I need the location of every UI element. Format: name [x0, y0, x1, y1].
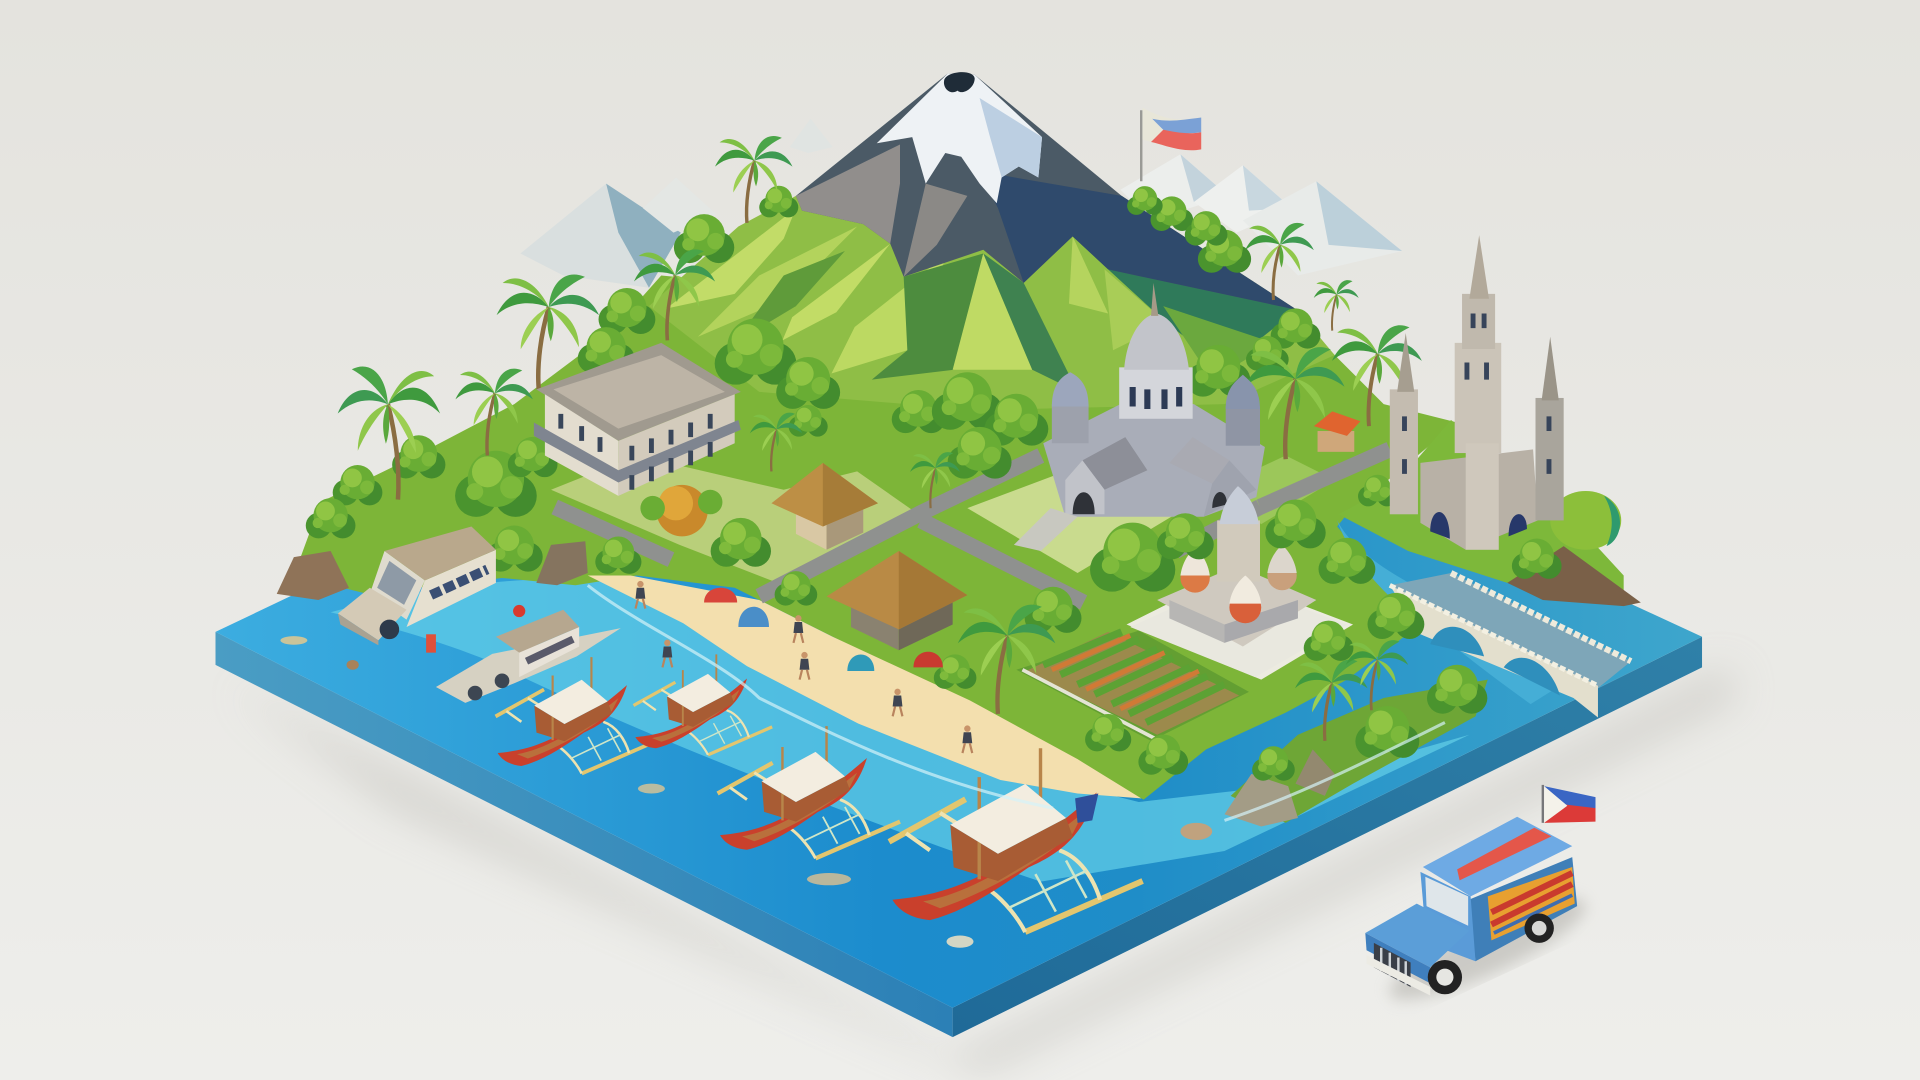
wave highlights — [588, 585, 1445, 820]
shallow water — [331, 579, 1469, 882]
ferry boat — [436, 605, 621, 703]
slab shadow — [233, 667, 1739, 1075]
church island — [1338, 420, 1641, 606]
jeepney — [1365, 817, 1577, 996]
back mountains — [520, 119, 1402, 288]
outrigger boat 3 — [718, 726, 900, 858]
orange bush — [640, 485, 722, 536]
thatched hut front — [827, 551, 967, 650]
flag on mountain — [1141, 108, 1201, 181]
crater — [944, 72, 975, 92]
back trees and bushes — [306, 136, 1422, 572]
water base slab — [216, 490, 1702, 1037]
cathedral steps — [1014, 508, 1078, 551]
islet with rocks — [1224, 680, 1488, 827]
mansion — [534, 343, 741, 496]
beach umbrellas and people — [636, 581, 972, 753]
river — [1337, 520, 1580, 704]
island land mass — [294, 276, 1457, 800]
roads — [555, 449, 1390, 602]
shore rocks — [277, 541, 588, 600]
boat 4 flag — [1075, 793, 1098, 823]
gothic church — [1390, 235, 1564, 550]
jeepney shadow — [1380, 881, 1596, 1017]
front trees and bushes — [595, 413, 1487, 781]
jeepney flag — [1543, 785, 1596, 823]
bridge — [1390, 573, 1631, 718]
thatched hut back — [771, 463, 878, 550]
light ground — [551, 456, 918, 585]
small temple — [1130, 486, 1347, 677]
small red pavilion — [1314, 411, 1360, 452]
outrigger boat 2 — [634, 654, 772, 755]
vegetable farm — [1022, 632, 1239, 740]
outrigger boat 1 — [496, 657, 656, 774]
beach — [588, 576, 1141, 798]
truck on shore — [338, 527, 496, 645]
outrigger boat 4 — [889, 748, 1143, 932]
cathedral — [1043, 283, 1265, 517]
volcano — [649, 72, 1335, 410]
swimmers and floats — [280, 634, 1212, 948]
